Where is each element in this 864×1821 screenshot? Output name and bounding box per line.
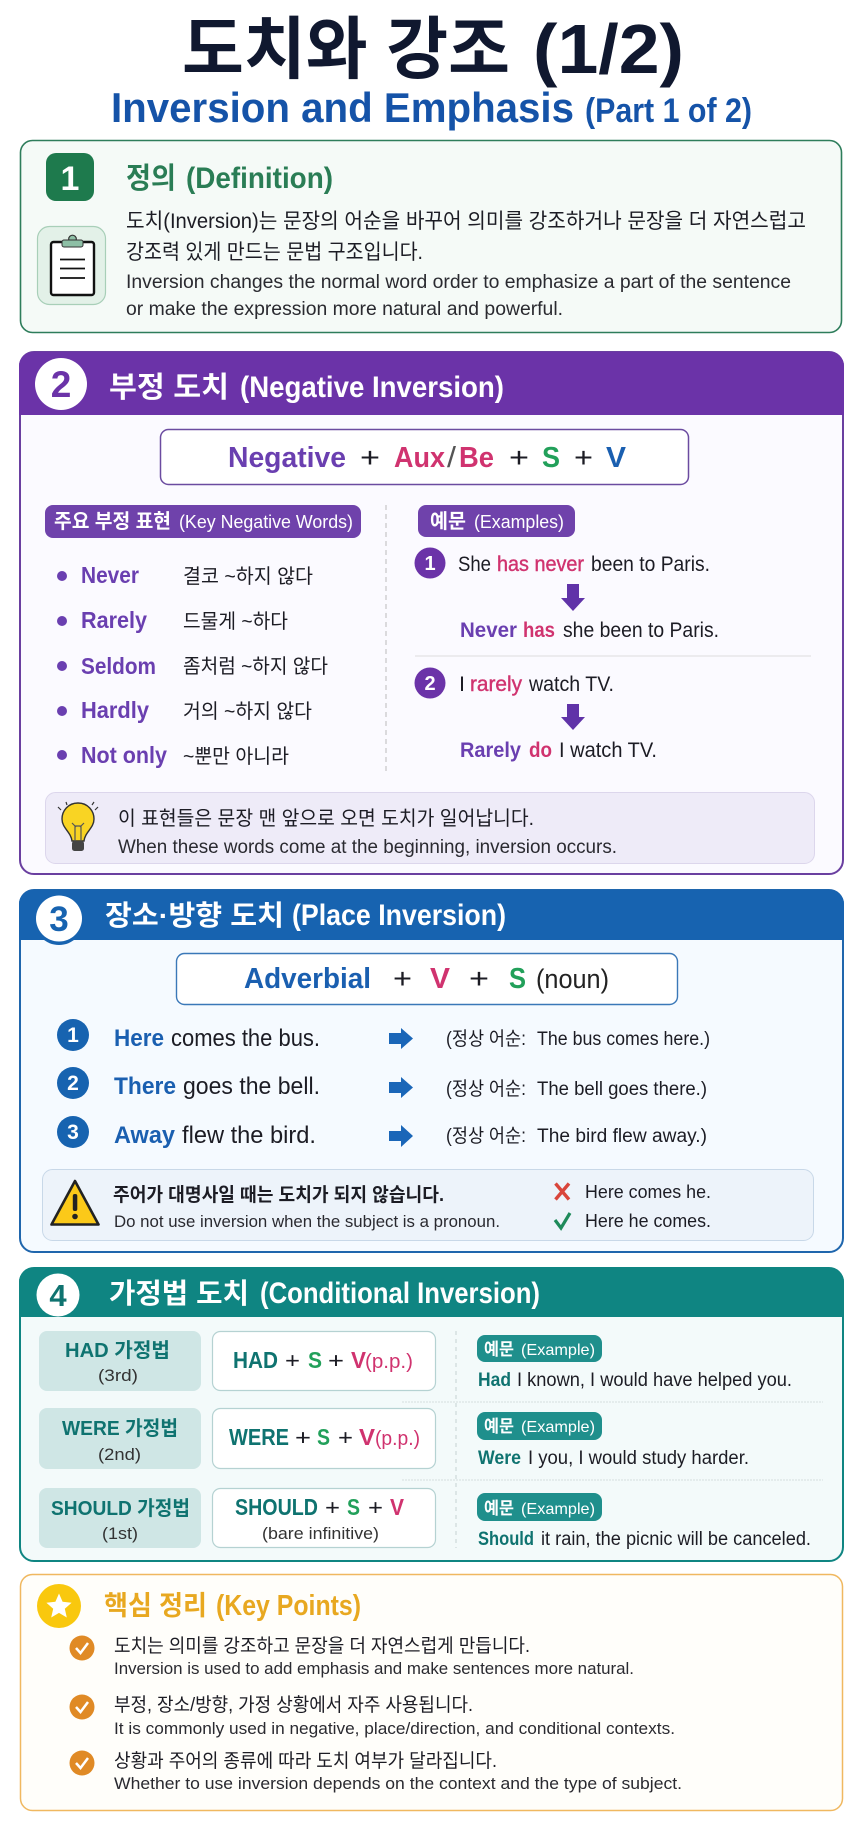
place example 1: 1 <box>67 1024 79 1047</box>
title: 도치와 강조 <box>182 12 510 88</box>
formula box: S <box>542 442 560 474</box>
key point 2: 부정, 장소/방향, 가정 상황에서 자주 사용됩니다. <box>114 1694 473 1716</box>
row: were: + <box>295 1425 311 1450</box>
row: should: S <box>347 1494 360 1520</box>
row: should: Should <box>478 1529 534 1550</box>
header bar: 4 <box>49 1278 67 1313</box>
pill: key negative words: (Key Negative Words) <box>179 512 353 532</box>
row: should: 예문 <box>484 1499 514 1518</box>
example 1: has never <box>497 553 584 576</box>
title: (1/2) <box>533 10 684 88</box>
formula box: / <box>447 442 457 474</box>
list: negative words <box>57 562 328 768</box>
row: had: (3rd) <box>98 1366 138 1385</box>
row: should: V <box>390 1494 405 1520</box>
example 2 <box>414 668 657 762</box>
row: had: S <box>308 1347 322 1373</box>
header bar <box>19 1268 844 1317</box>
subtitle: Inversion and Emphasis <box>111 84 574 131</box>
row: were: V <box>359 1424 376 1450</box>
key point 2 <box>70 1694 675 1738</box>
row: had: (Example) <box>521 1342 595 1359</box>
definition text: or make the expression more natural and powerful. <box>126 299 563 320</box>
row: were: + <box>338 1425 353 1450</box>
list: negative words: Not only <box>81 742 167 768</box>
header bar: 가정법 도치 <box>109 1278 249 1309</box>
list: negative words: 결코 ~하지 않다 <box>183 565 313 588</box>
place example 1: comes the bus. <box>171 1025 320 1052</box>
tip box: When these words come at the beginning, inversion occurs. <box>118 837 617 858</box>
definition text: 도치(Inversion)는 문장의 어순을 바꾸어 의미를 강조하거나 문장을 더 자연스럽고 <box>126 210 806 233</box>
row: were: 예문 <box>484 1417 514 1436</box>
place example 2: goes the bell. <box>183 1073 320 1100</box>
place example 3: The bird flew away.) <box>537 1126 707 1147</box>
definition text: 강조력 있게 만드는 문법 구조입니다. <box>126 241 423 264</box>
key point 3 <box>70 1750 682 1793</box>
formula box: V <box>430 963 451 995</box>
panel: key points <box>20 1574 842 1810</box>
formula box: Aux <box>394 442 445 474</box>
example 1: 1 <box>424 553 436 575</box>
row: had: 예문 <box>484 1340 514 1359</box>
place example 1: (정상 어순: <box>446 1028 526 1050</box>
icon: warning triangle <box>52 1181 98 1224</box>
header bar: (Place Inversion) <box>292 899 506 932</box>
key point 3: 상황과 주어의 종류에 따라 도치 여부가 달라집니다. <box>114 1750 497 1772</box>
warning box: 주어가 대명사일 때는 도치가 되지 않습니다. <box>113 1184 444 1206</box>
row: were: WERE 가정법 <box>62 1417 178 1440</box>
row: had: (p.p.) <box>365 1351 413 1373</box>
formula box: + <box>360 442 380 473</box>
header bar: 2 <box>51 364 71 405</box>
example 2: Rarely <box>460 739 521 762</box>
row: were: I you, I would study harder. <box>528 1448 749 1469</box>
formula box: S <box>509 963 526 995</box>
definition heading <box>126 162 333 195</box>
place example 2: 2 <box>67 1072 79 1095</box>
place example 2: There <box>114 1073 176 1100</box>
warning box <box>42 1170 814 1240</box>
row: should: + <box>368 1495 383 1520</box>
place example 1: The bus comes here.) <box>537 1029 710 1050</box>
list: negative words: ~뿐만 아니라 <box>183 745 289 768</box>
tip box: 이 표현들은 문장 맨 앞으로 오면 도치가 일어납니다. <box>118 807 534 830</box>
row: were: Were <box>478 1448 521 1469</box>
row: had: I known, I would have helped you. <box>517 1370 792 1391</box>
row: should: (1st) <box>102 1524 138 1543</box>
example 2: I watch TV. <box>559 739 657 762</box>
header bar <box>19 352 844 415</box>
formula box: + <box>469 963 489 994</box>
list: negative words: 거의 ~하지 않다 <box>183 700 312 723</box>
header bar: 3 <box>49 900 69 939</box>
pill: examples <box>418 505 575 537</box>
formula box: Negative <box>228 442 346 474</box>
row: had: HAD <box>233 1347 278 1373</box>
panel: conditional inversion <box>19 1268 844 1561</box>
key point 1: Inversion is used to add emphasis and make sentences more natural. <box>114 1659 634 1678</box>
formula box: + <box>393 963 412 994</box>
row: should: SHOULD <box>235 1494 318 1520</box>
place example 3: flew the bird. <box>182 1122 316 1149</box>
place example 1 <box>57 1019 710 1052</box>
list: negative words: Hardly <box>81 697 149 723</box>
header bar: 부정 도치 <box>109 371 229 404</box>
place example 1: Here <box>114 1025 164 1052</box>
definition text <box>126 210 806 320</box>
row: were: (p.p.) <box>375 1428 420 1450</box>
example 1: Never <box>460 619 517 642</box>
key point 2: It is commonly used in negative, place/direction, and conditional contexts. <box>114 1719 675 1738</box>
formula box <box>176 954 678 1004</box>
tip box <box>46 792 814 864</box>
key points heading: 핵심 정리 <box>104 1591 207 1621</box>
list: negative words: 드물게 ~하다 <box>183 610 288 633</box>
example 1 <box>414 548 719 642</box>
row: had: Had <box>478 1370 511 1391</box>
list: negative words: 좀처럼 ~하지 않다 <box>183 655 328 678</box>
formula box: V <box>606 442 627 474</box>
warning box: Here comes he. <box>585 1182 711 1202</box>
formula box: Adverbial <box>244 963 371 995</box>
definition heading: 정의 <box>126 162 176 195</box>
example 2: rarely <box>470 673 522 696</box>
example 2: 2 <box>424 673 436 695</box>
row: should: (bare infinitive) <box>262 1524 379 1543</box>
list: negative words: Never <box>81 562 139 588</box>
header bar: (Negative Inversion) <box>240 371 504 404</box>
row: had: HAD 가정법 <box>65 1339 170 1362</box>
badge: number 1: 1 <box>61 160 79 198</box>
row: were: (2nd) <box>98 1445 141 1464</box>
header bar: (Conditional Inversion) <box>260 1277 540 1310</box>
panel: place inversion <box>19 890 844 1252</box>
key point 3: Whether to use inversion depends on the context and the type of subject. <box>114 1774 682 1793</box>
warning box: Do not use inversion when the subject is a pronoun. <box>114 1212 500 1231</box>
example 1: She <box>458 553 491 576</box>
icon: star <box>37 1584 81 1628</box>
row: had: + <box>328 1348 344 1373</box>
place example 3: (정상 어순: <box>446 1125 526 1147</box>
pill: key negative words: 주요 부정 표현 <box>54 510 171 533</box>
row: had <box>39 1331 792 1391</box>
row: should: SHOULD 가정법 <box>51 1497 190 1520</box>
definition text: Inversion changes the normal word order to emphasize a part of the sentence <box>126 272 791 293</box>
formula box <box>160 430 688 484</box>
example 2: I <box>459 673 465 696</box>
subtitle: (Part 1 of 2) <box>585 92 752 130</box>
icon: cross <box>556 1184 569 1200</box>
example 1: been to Paris. <box>591 553 710 576</box>
header bar: 장소·방향 도치 <box>105 900 284 931</box>
place example 2 <box>57 1067 707 1100</box>
panel: definition <box>20 140 842 332</box>
pill: examples: (Examples) <box>474 512 564 532</box>
pill: examples: 예문 <box>430 510 466 533</box>
place example 3: Away <box>114 1122 176 1149</box>
row: were <box>39 1408 749 1469</box>
place example 3 <box>57 1116 707 1149</box>
badge: number 1 <box>46 153 94 201</box>
panel: negative inversion <box>19 352 844 874</box>
row: were: S <box>317 1424 330 1450</box>
example 1: she been to Paris. <box>563 619 719 642</box>
example 1: has <box>523 619 555 642</box>
row: were: WERE <box>229 1424 289 1450</box>
formula box: (noun) <box>536 964 609 994</box>
place example 3: 3 <box>67 1121 79 1144</box>
title <box>182 10 684 88</box>
row: had: V <box>351 1347 367 1373</box>
pill: key negative words <box>45 505 361 538</box>
row: should: it rain, the picnic will be canceled. <box>541 1529 811 1550</box>
row: should: + <box>325 1495 340 1520</box>
place example 2: (정상 어순: <box>446 1078 526 1100</box>
example 2: watch TV. <box>528 673 614 696</box>
icon: check <box>555 1213 570 1228</box>
header bar <box>19 890 844 945</box>
definition heading: (Definition) <box>186 162 333 195</box>
icon: light bulb <box>58 802 98 851</box>
icon: clipboard <box>38 226 106 304</box>
row: should: (Example) <box>521 1501 595 1518</box>
key points heading: (Key Points) <box>216 1590 361 1622</box>
formula box: + <box>574 442 593 473</box>
example 2: do <box>529 739 552 762</box>
row: should <box>39 1488 811 1550</box>
key points heading <box>104 1590 361 1622</box>
formula box: Be <box>459 442 494 474</box>
row: had: + <box>285 1348 300 1373</box>
row: were: (Example) <box>521 1419 595 1436</box>
key point 1 <box>70 1635 634 1678</box>
list: negative words: Rarely <box>81 607 147 633</box>
warning box: Here he comes. <box>585 1211 711 1231</box>
list: negative words: Seldom <box>81 653 156 679</box>
key point 1: 도치는 의미를 강조하고 문장을 더 자연스럽게 만듭니다. <box>114 1635 530 1657</box>
formula box: + <box>509 442 529 473</box>
place example 2: The bell goes there.) <box>537 1079 707 1100</box>
